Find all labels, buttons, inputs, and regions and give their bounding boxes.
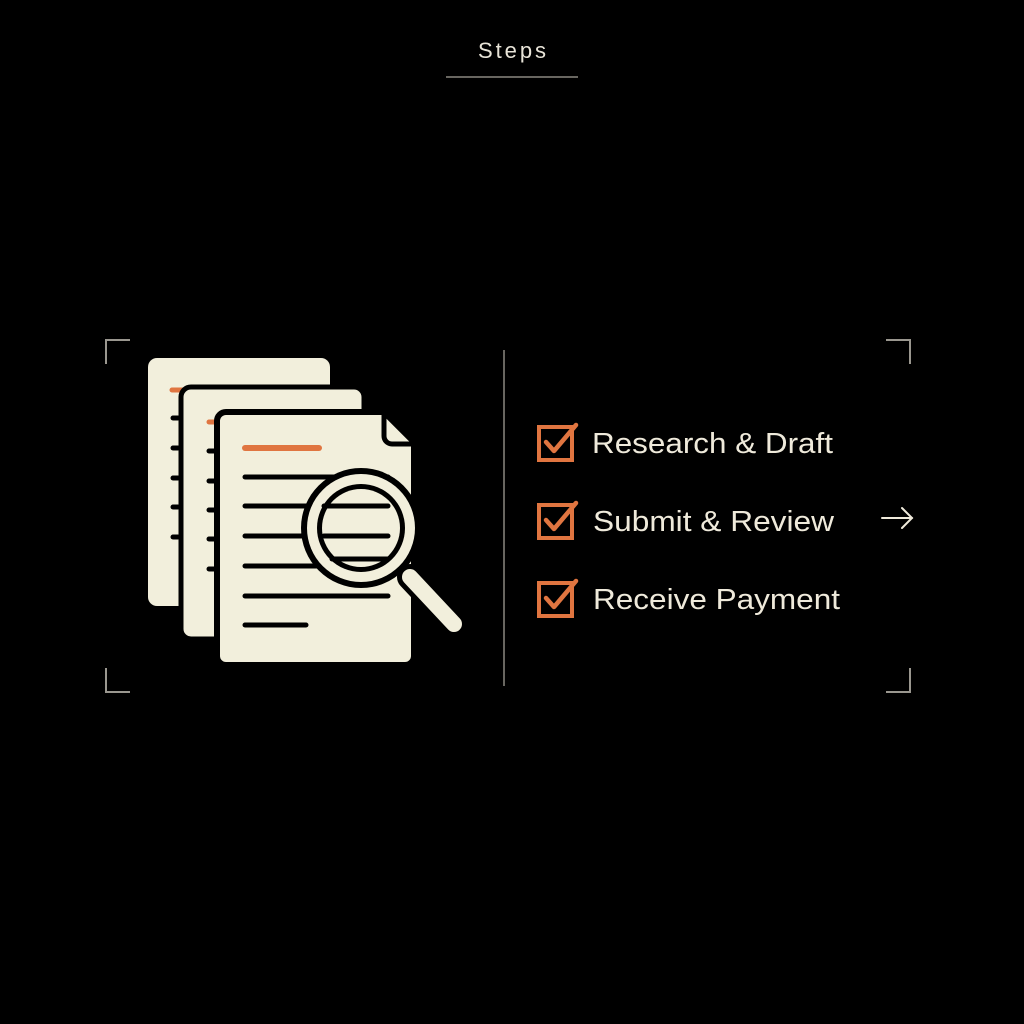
step list <box>539 425 840 616</box>
step 1 <box>539 425 833 460</box>
arrow <box>882 508 912 528</box>
front page <box>217 412 414 665</box>
title: Steps <box>478 38 546 63</box>
middle page <box>181 387 364 639</box>
step 1: Research & Draft <box>592 428 833 460</box>
magnifier <box>301 468 454 624</box>
step 2: Submit & Review <box>593 506 835 538</box>
icon: documents with magnifier <box>148 358 454 665</box>
step 2 <box>539 503 835 538</box>
back page <box>148 358 330 606</box>
divider <box>503 350 505 686</box>
corner brackets <box>106 340 910 692</box>
title <box>446 38 578 77</box>
step 3 <box>539 581 840 616</box>
step 3: Receive Payment <box>593 584 840 616</box>
